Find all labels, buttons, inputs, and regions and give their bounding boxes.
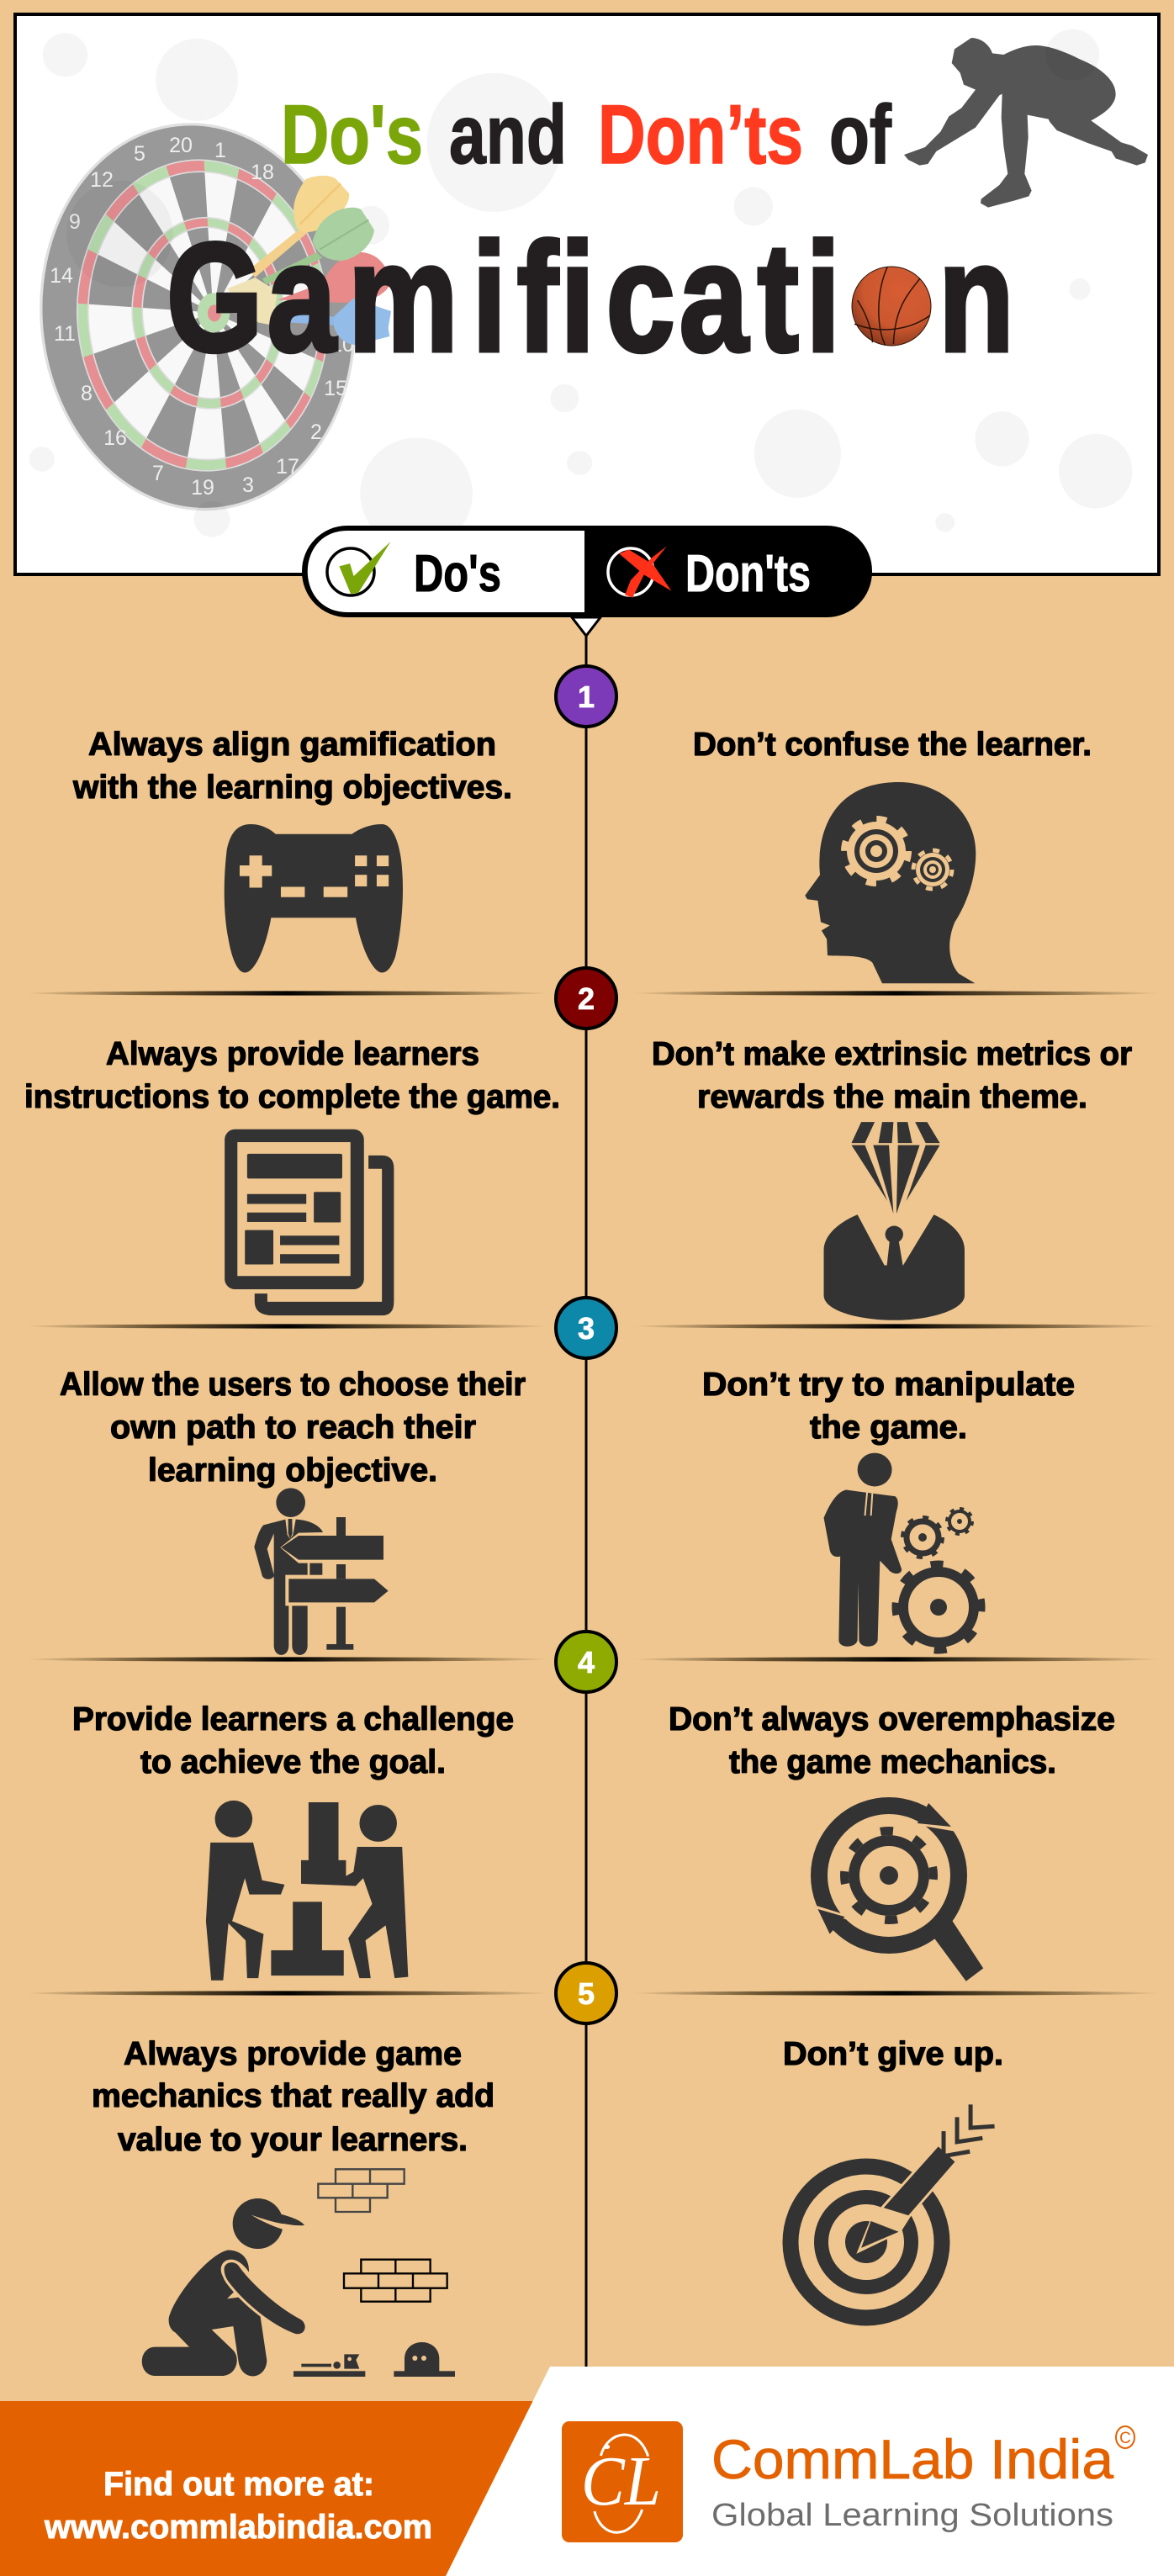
- dartboard numbers: 11: [54, 322, 76, 346]
- text: do 2: instructions to complete the game.: [24, 1079, 560, 1115]
- dartboard numbers: 14: [50, 264, 73, 288]
- logo: copyright mark: [1116, 2426, 1134, 2448]
- text: don't 3: Don’t try to manipulate: [702, 1367, 1075, 1403]
- dartboard numbers: 20: [169, 134, 193, 157]
- dartboard numbers: 3: [242, 473, 254, 497]
- icon: magnifier with gear: [815, 1803, 983, 1981]
- text: don't 2: Don’t make extrinsic metrics or: [652, 1036, 1132, 1072]
- toggle: do's and don'ts: [302, 526, 872, 617]
- title line one: [281, 87, 892, 181]
- panel: do 1: [72, 727, 512, 973]
- number badge 2: 2: [578, 981, 595, 1016]
- text: do 4: Provide learners a challenge: [72, 1701, 514, 1738]
- text: don't 4: [669, 1701, 1115, 1780]
- text: do 1: with the learning objectives.: [72, 770, 512, 806]
- dartboard numbers: 10: [331, 333, 354, 357]
- panel: footer: [0, 2367, 1174, 2576]
- number badge 1: 1: [578, 680, 595, 714]
- panel: do 3: [60, 1367, 526, 1655]
- pointer triangle: [572, 617, 600, 636]
- number badge 3: 3: [578, 1311, 595, 1346]
- text: don't 3: [702, 1367, 1075, 1446]
- dartboard numbers: 15: [324, 377, 347, 400]
- icon: dartboard: [40, 123, 355, 511]
- timeline spine: [585, 631, 587, 2372]
- icon: man with gears: [824, 1453, 989, 1658]
- dartboard numbers: 12: [90, 168, 114, 192]
- dartboard numbers: 1: [214, 139, 226, 162]
- title line two: Gamification: [167, 211, 1014, 384]
- logo: company name: CommLab India: [711, 2428, 1113, 2490]
- text: do 3: learning objective.: [148, 1452, 437, 1489]
- text: don't 2: [652, 1036, 1132, 1115]
- text: don't 2: rewards the main theme.: [697, 1079, 1087, 1115]
- text: do 1: Always align gamification: [88, 727, 496, 763]
- text: find out more: [44, 2466, 432, 2546]
- text: find out more: Find out more at:: [103, 2466, 374, 2503]
- dartboard numbers: 18: [251, 161, 274, 184]
- text: do 3: Allow the users to choose their: [60, 1367, 526, 1403]
- panel: do 2: [24, 1036, 560, 1315]
- text: don't 4: the game mechanics.: [729, 1744, 1056, 1780]
- number badge 4: [556, 1632, 616, 1692]
- title line one: Don’ts: [598, 87, 803, 181]
- icon: check mark: [327, 542, 391, 595]
- logo: commlab mark: CL: [581, 2442, 661, 2520]
- dartboard numbers: 2: [310, 421, 322, 444]
- icon: man with signpost: [254, 1488, 389, 1655]
- icon: target with arrow: [791, 2104, 995, 2318]
- panel: do 5: [92, 2036, 494, 2377]
- panel: don't 3: [702, 1367, 1075, 1658]
- dartboard numbers: 17: [276, 455, 299, 479]
- section dividers: [25, 991, 1161, 1996]
- icon: head with gears: [805, 782, 976, 983]
- icon: basketball: [852, 267, 931, 346]
- text: do 4: to achieve the goal.: [140, 1744, 446, 1780]
- icon: diamond over suit: [824, 1122, 965, 1320]
- text: do 4: [72, 1701, 514, 1780]
- dartboard numbers: 9: [69, 210, 81, 234]
- text: do 3: [60, 1367, 526, 1489]
- text: don't 5: Don’t give up.: [783, 2036, 1003, 2072]
- label: do's: Do's: [414, 545, 501, 603]
- text: do 5: [92, 2036, 494, 2158]
- number badge 1: [556, 666, 616, 727]
- dartboard numbers: 19: [191, 476, 214, 500]
- dartboard numbers: 7: [152, 462, 164, 485]
- text: find out more: www.commlabindia.com: [44, 2509, 432, 2546]
- logo: commlab mark: [562, 2421, 683, 2542]
- text: do 1: [72, 727, 512, 806]
- text: do 5: mechanics that really add: [92, 2078, 494, 2114]
- text: do 2: [24, 1036, 560, 1115]
- footer white band: [446, 2367, 1174, 2576]
- icon: kneeling worker with bricks: [142, 2169, 455, 2377]
- text: don't 1: Don’t confuse the learner.: [693, 727, 1092, 763]
- number badge 4: 4: [578, 1645, 595, 1679]
- text: do 5: Always provide game: [124, 2036, 462, 2072]
- icon: darts: [227, 176, 391, 345]
- dartboard numbers: 16: [103, 426, 127, 450]
- number badge 2: [556, 968, 616, 1029]
- panel: do 4: [72, 1701, 514, 1981]
- label: don'ts: Don'ts: [685, 545, 811, 603]
- text: do 3: own path to reach their: [110, 1410, 476, 1446]
- panel: don't 2: [652, 1036, 1132, 1320]
- icon: cross mark: [608, 546, 671, 598]
- dartboard numbers: 8: [81, 382, 93, 405]
- panel: don't 5: [783, 2036, 1003, 2318]
- logo: tagline: Global Learning Solutions: [711, 2498, 1113, 2533]
- title line one: and: [449, 87, 567, 181]
- logo: copyright mark: C: [1119, 2430, 1131, 2447]
- panel: don't 4: [669, 1701, 1115, 1981]
- dartboard numbers: [50, 134, 354, 500]
- title line one: of: [829, 87, 892, 181]
- text: don't 3: the game.: [810, 1410, 967, 1446]
- title line one: Do's: [281, 87, 423, 181]
- icon: game controller: [225, 824, 403, 973]
- icon: two people stacking blocks: [206, 1801, 408, 1981]
- text: do 5: value to your learners.: [118, 2122, 468, 2158]
- number badge 5: [556, 1963, 616, 2023]
- icon: player silhouette: [904, 38, 1148, 208]
- background bubbles: [29, 29, 1132, 549]
- panel: header: [15, 14, 1159, 574]
- panel: don't 1: [693, 727, 1092, 983]
- icon: newspaper: [225, 1129, 394, 1315]
- number badge 5: 5: [578, 1976, 595, 2011]
- number badge 3: [556, 1298, 616, 1358]
- footer orange band: [0, 2401, 555, 2576]
- text: don't 4: Don’t always overemphasize: [669, 1701, 1115, 1738]
- text: do 2: Always provide learners: [106, 1036, 479, 1072]
- dartboard numbers: 5: [134, 142, 145, 166]
